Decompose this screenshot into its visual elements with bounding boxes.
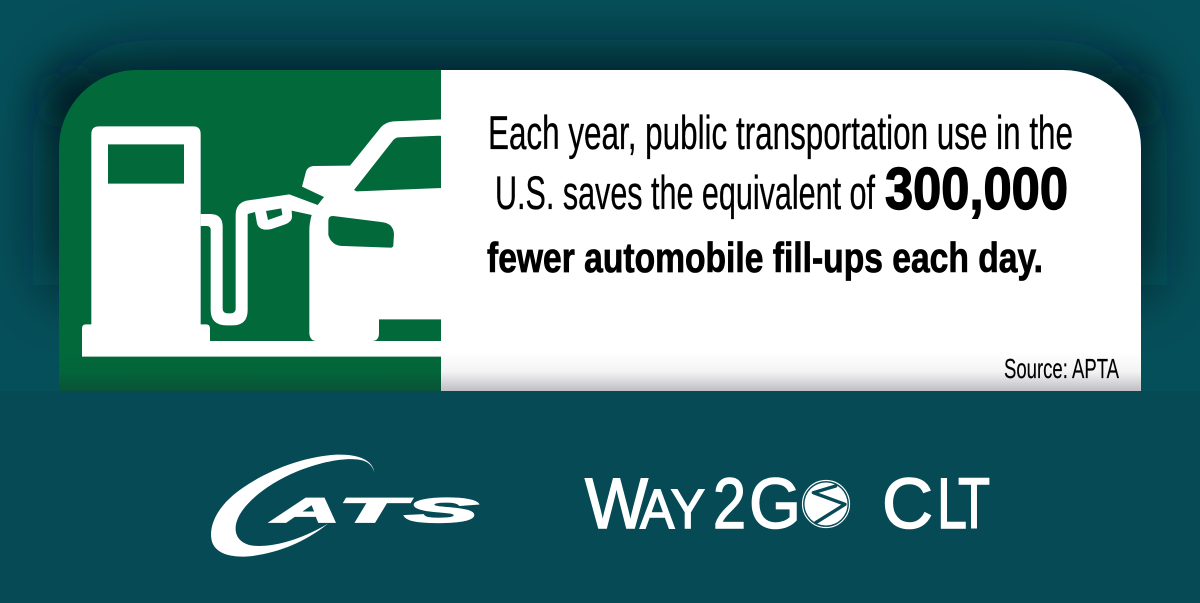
logo letter W: W bbox=[585, 465, 648, 544]
big number: 300,000 bbox=[885, 156, 1068, 222]
panel: green icon area bbox=[59, 70, 441, 391]
logo swoosh bbox=[211, 455, 374, 557]
lower background band bbox=[0, 391, 1200, 603]
source note: Source: APTA bbox=[1004, 353, 1119, 384]
letter S: S bbox=[405, 492, 478, 530]
logo: circular arrow emblem bbox=[802, 480, 850, 528]
panel: white text area bbox=[441, 70, 1141, 391]
letter A: A bbox=[271, 492, 340, 530]
logo letter T: T bbox=[958, 465, 990, 544]
text block: main statement bbox=[487, 106, 1073, 281]
icon: pump base and ground line bbox=[82, 324, 452, 357]
logo letters bbox=[271, 492, 478, 530]
icon: car with hose and nozzle bbox=[201, 119, 441, 341]
logo: CATS bbox=[211, 455, 478, 557]
panel: fact card bbox=[59, 70, 1141, 391]
logo letter L: L bbox=[937, 465, 967, 544]
logo letter C: C bbox=[882, 465, 933, 544]
icon: fuel pump and car bbox=[82, 119, 452, 357]
line 3: fewer automobile fill-ups each day. bbox=[487, 234, 1043, 281]
panel shadow bbox=[47, 62, 1153, 285]
logo: Way2Go CLT bbox=[585, 465, 990, 544]
bottom edge shading bbox=[59, 366, 1141, 391]
icon: fuel pump body bbox=[91, 126, 201, 327]
letter T: T bbox=[338, 492, 412, 530]
logo letter G: G bbox=[749, 465, 801, 544]
line 2: U.S. saves the equivalent of bbox=[495, 166, 876, 219]
logo letters AY: AY bbox=[640, 477, 705, 540]
logo numeral 2: 2 bbox=[713, 465, 746, 544]
